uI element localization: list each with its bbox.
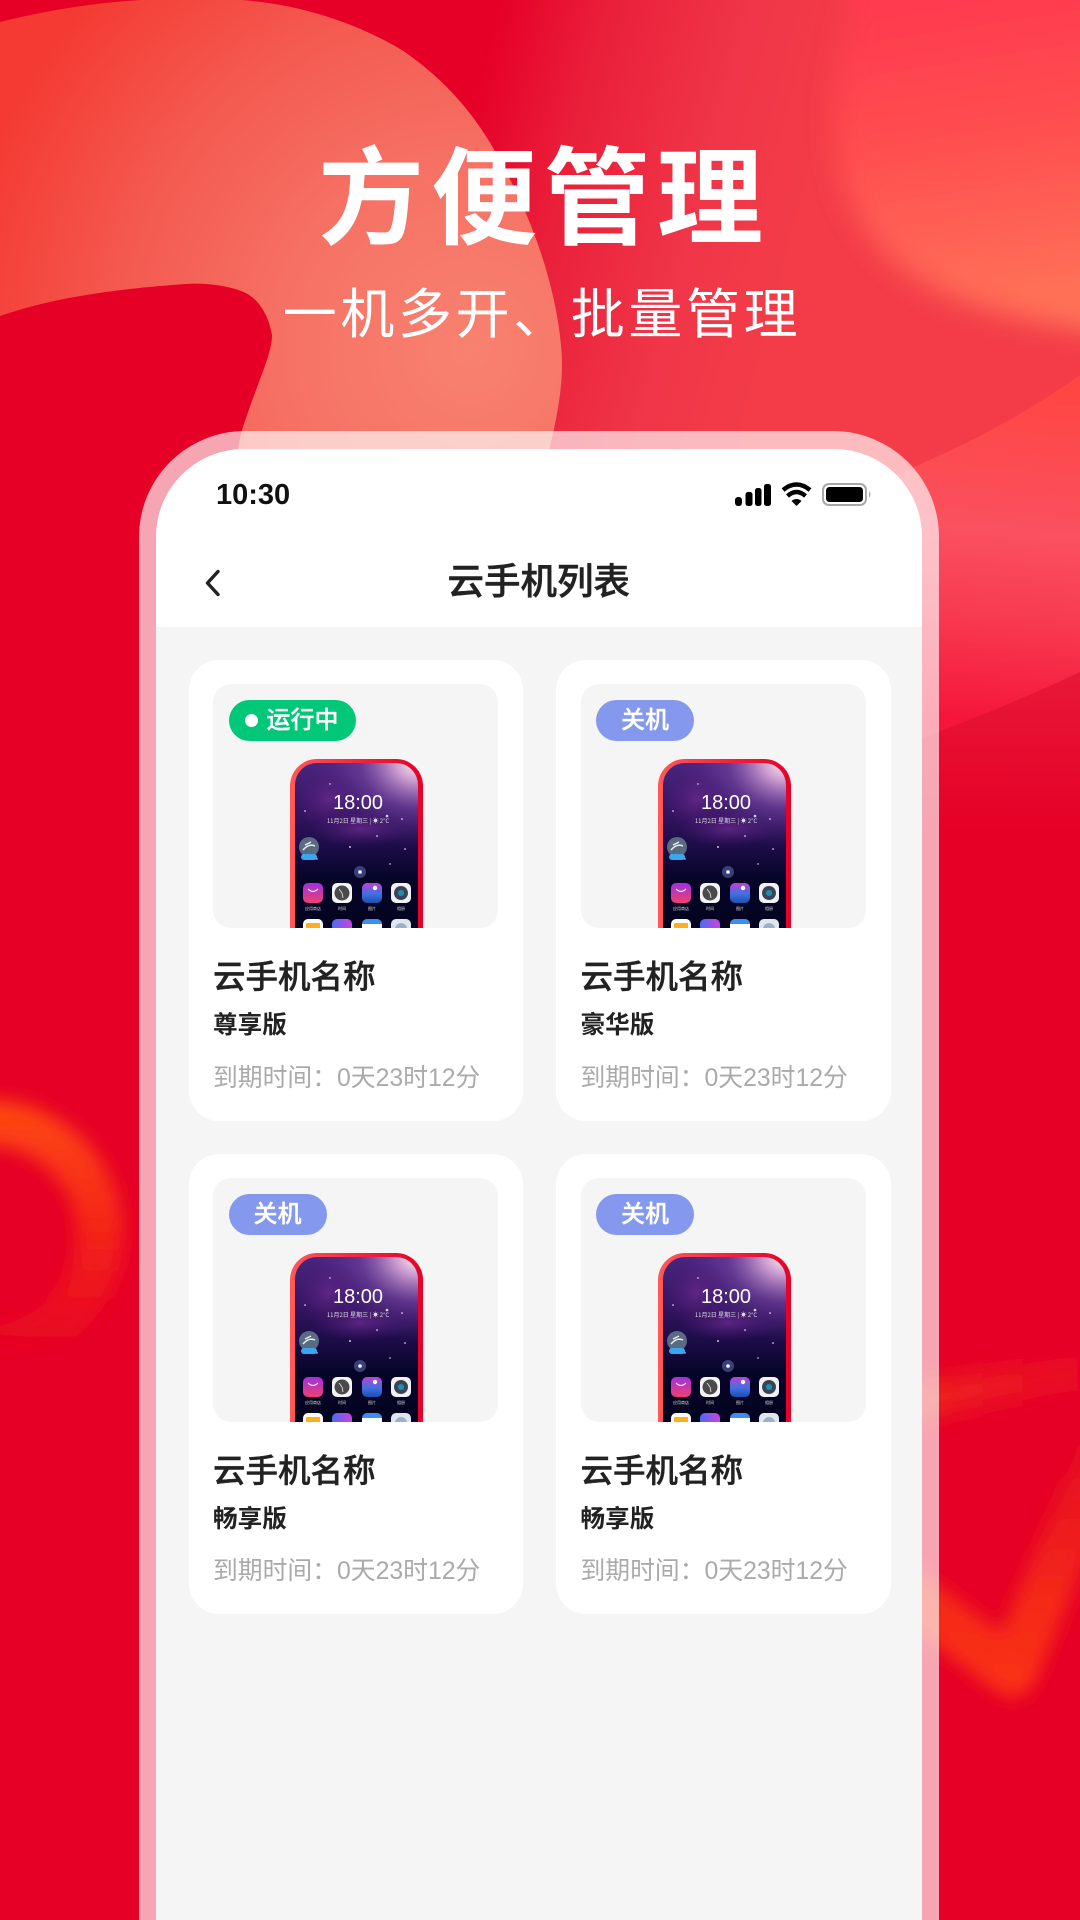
phone frame xyxy=(138,431,939,1920)
preview xyxy=(580,1178,866,1422)
status time: 10:30 xyxy=(216,479,290,511)
right faint stroke xyxy=(890,1370,1080,1408)
title: 方便管理 xyxy=(318,113,770,267)
mini phone: 图片 xyxy=(736,1398,744,1406)
mini phone: 11月2日 星期三 | ☀ 2°C xyxy=(694,1310,757,1318)
mini phone: 时间 xyxy=(706,1398,714,1406)
card 1 xyxy=(188,660,523,1121)
mini phone: 相册 xyxy=(397,1398,405,1406)
mini phone: 相册 xyxy=(764,905,772,912)
mini phone: 18:00 xyxy=(333,1286,383,1308)
status badge xyxy=(228,700,356,741)
status badge: 关机 xyxy=(621,707,669,734)
name: 云手机名称 xyxy=(213,1452,376,1488)
status badge: 运行中 xyxy=(266,707,338,734)
expiry: 到期时间：0天23时12分 xyxy=(580,1558,848,1585)
mini phone: 图片 xyxy=(736,905,744,912)
app header xyxy=(156,449,922,627)
edition: 畅享版 xyxy=(213,1506,287,1532)
mini phone: 18:00 xyxy=(700,1286,751,1308)
diagonal light band at right xyxy=(780,375,1080,790)
preview xyxy=(213,684,498,928)
icon: status bar signal wifi battery xyxy=(735,482,870,506)
status badge xyxy=(596,1194,694,1234)
mini phone xyxy=(290,1253,423,1422)
mini phone: 相册 xyxy=(397,905,405,912)
right V stroke xyxy=(890,1460,1080,1672)
subtitle: 一机多开、批量管理 xyxy=(283,270,801,349)
mini phone: 图片 xyxy=(368,905,376,912)
expiry: 到期时间：0天23时12分 xyxy=(213,1064,480,1092)
name: 云手机名称 xyxy=(580,1452,743,1488)
mini phone xyxy=(658,759,791,928)
status badge: 关机 xyxy=(621,1200,669,1228)
mini phone xyxy=(658,1253,791,1422)
card 3 xyxy=(188,1154,523,1614)
top right soft blob xyxy=(835,0,1080,338)
edition: 畅享版 xyxy=(580,1506,654,1532)
mini phone: 时间 xyxy=(706,905,714,912)
mini phone: 时间 xyxy=(338,905,346,912)
phone screen xyxy=(156,449,922,1920)
mini phone xyxy=(290,759,423,928)
page heading: 云手机列表 xyxy=(448,561,630,602)
icon: back arrow xyxy=(206,570,220,596)
upper right wash xyxy=(300,0,1080,540)
status badge xyxy=(596,700,694,741)
mini phone: 图片 xyxy=(368,1398,376,1406)
expiry: 到期时间：0天23时12分 xyxy=(213,1558,480,1585)
mini phone: 相册 xyxy=(764,1398,772,1406)
card 2 xyxy=(556,660,890,1121)
expiry: 到期时间：0天23时12分 xyxy=(580,1064,848,1092)
name: 云手机名称 xyxy=(213,959,376,995)
mini phone: 11月2日 星期三 | ☀ 2°C xyxy=(327,816,389,825)
mini phone: 应用商店 xyxy=(305,1398,321,1406)
mini phone: 11月2日 星期三 | ☀ 2°C xyxy=(694,816,757,825)
edition: 尊享版 xyxy=(213,1012,287,1039)
status badge xyxy=(228,1194,326,1234)
large left blob xyxy=(0,0,562,700)
mini phone: 应用商店 xyxy=(305,905,321,912)
preview xyxy=(213,1178,498,1422)
left orange ring xyxy=(0,1123,100,1347)
edition: 豪华版 xyxy=(580,1012,654,1039)
preview xyxy=(580,684,866,928)
name: 云手机名称 xyxy=(580,959,743,995)
mini phone: 时间 xyxy=(338,1398,346,1406)
mini phone: 应用商店 xyxy=(672,905,688,912)
mini phone: 18:00 xyxy=(333,792,383,814)
mini phone: 11月2日 星期三 | ☀ 2°C xyxy=(327,1310,389,1318)
mini phone: 应用商店 xyxy=(672,1398,688,1406)
mini phone: 18:00 xyxy=(700,792,751,814)
status badge: 关机 xyxy=(254,1200,302,1228)
card 4 xyxy=(556,1154,890,1614)
